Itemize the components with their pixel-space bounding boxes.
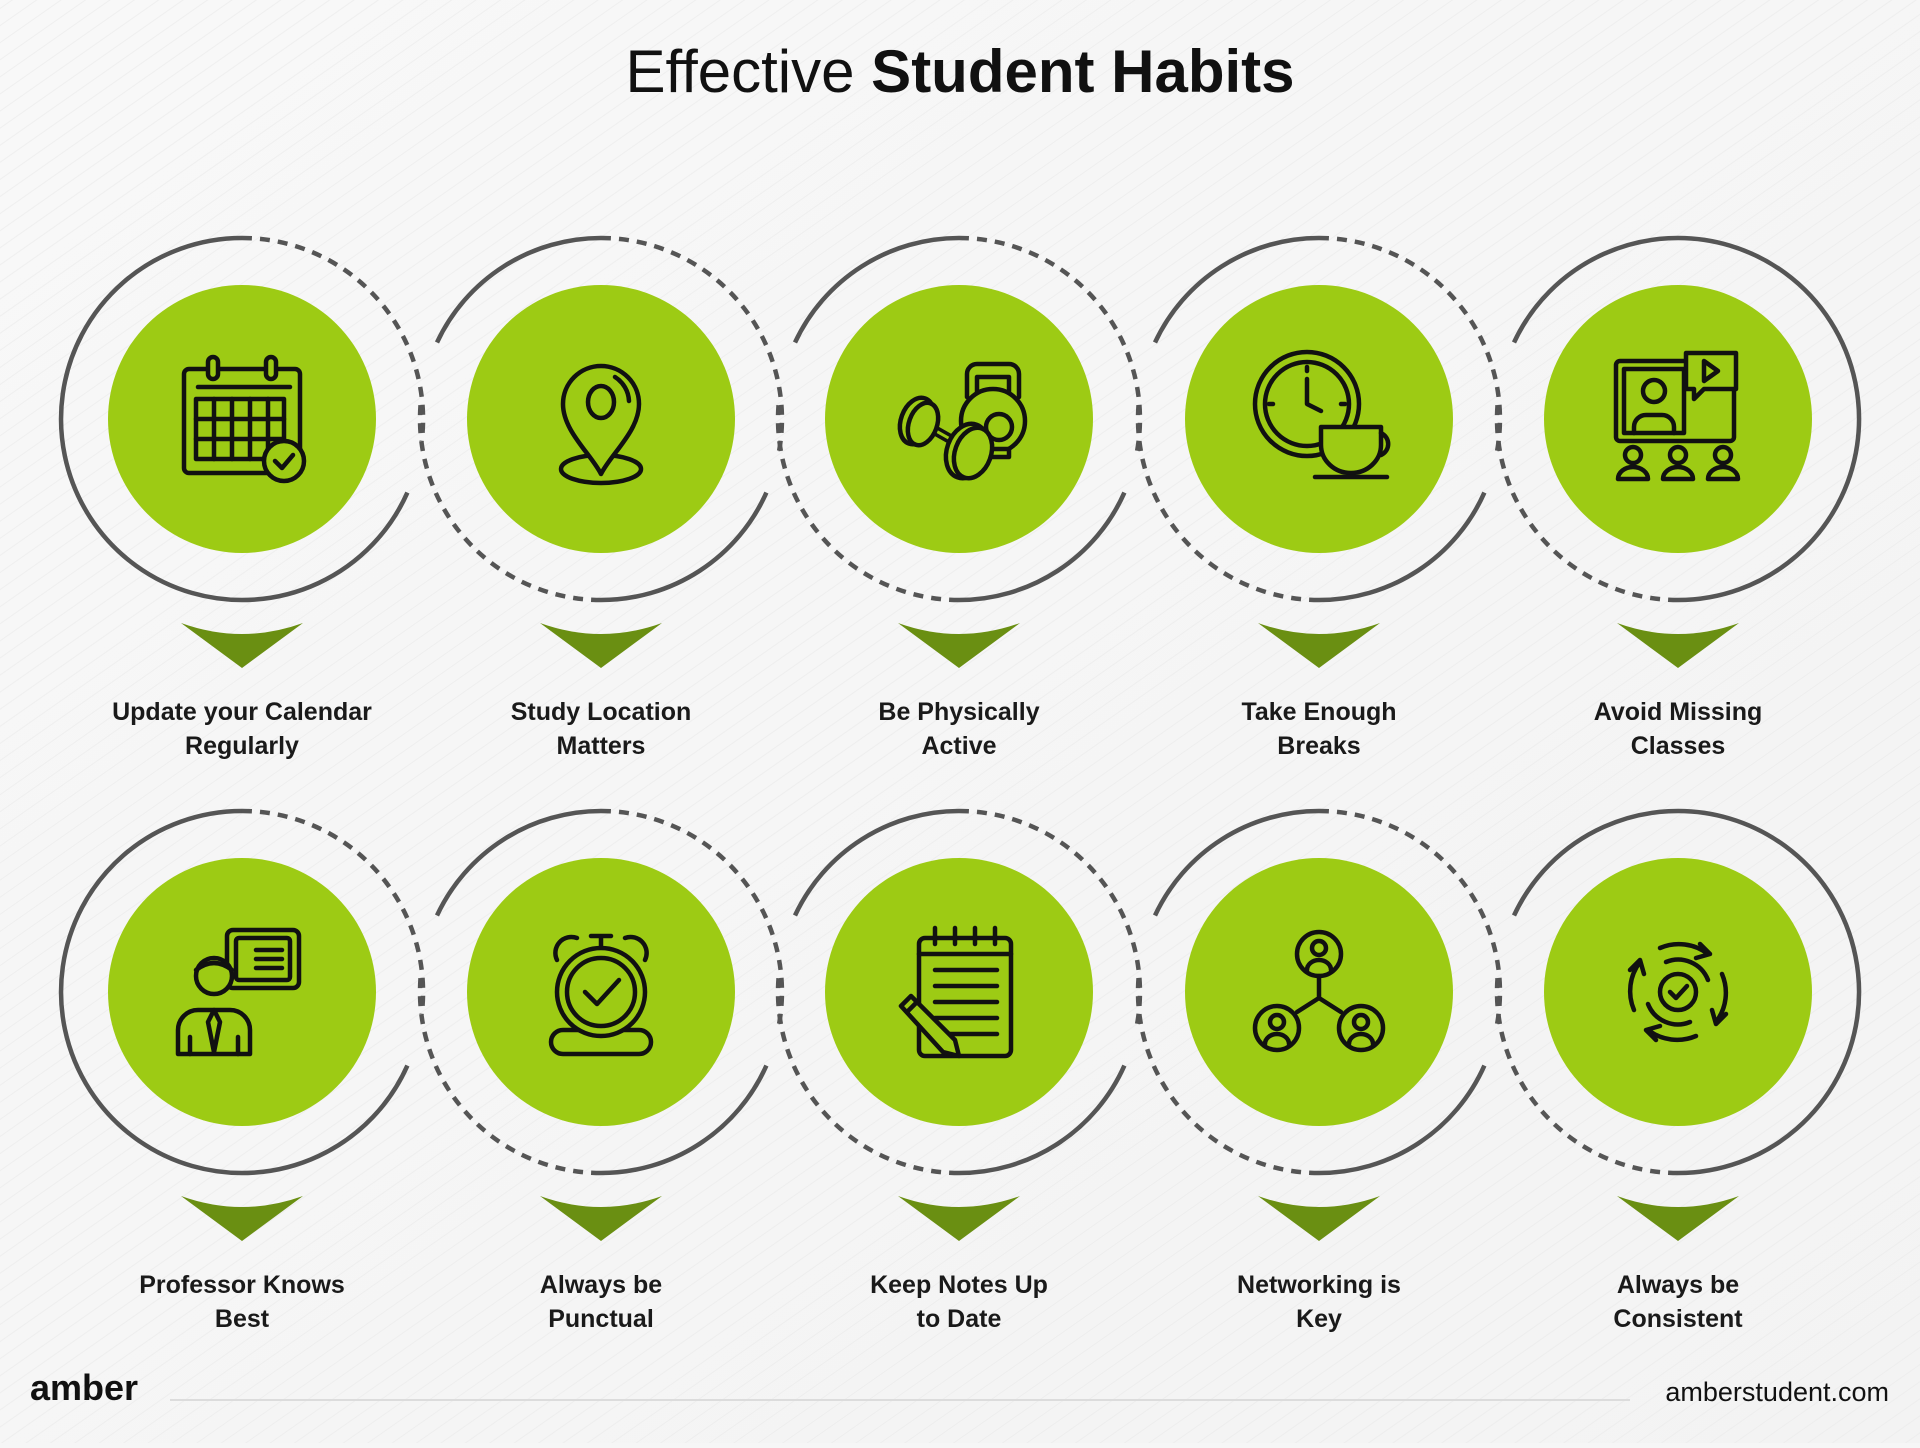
arrow — [1617, 1196, 1739, 1241]
label: Active — [921, 732, 997, 760]
icon: network — [1255, 932, 1383, 1050]
panel: Take Enough Breaks — [1138, 238, 1500, 600]
label: Always be — [1617, 1271, 1739, 1299]
label: Networking is — [1237, 1271, 1401, 1299]
footer logo: amber — [30, 1367, 138, 1408]
icon: cycle arrows — [1630, 944, 1726, 1040]
label: Study Location — [511, 698, 691, 726]
panel: Professor Knows Best — [61, 811, 423, 1173]
title: Effective Student Habits — [625, 38, 1295, 105]
arrow — [540, 1196, 662, 1241]
icon: dumbbell and kettlebell — [894, 364, 1025, 484]
panel: Be Physically Active — [778, 238, 1140, 600]
icon: notepad and pencil — [901, 928, 1011, 1056]
panel: Networking is Key — [1138, 811, 1500, 1173]
icon: online class — [1616, 353, 1738, 479]
footer url: amberstudent.com — [1665, 1377, 1889, 1407]
arrow — [540, 623, 662, 668]
panel: Always be Punctual — [420, 811, 782, 1173]
label: Avoid Missing — [1594, 698, 1762, 726]
label: Professor Knows — [139, 1271, 345, 1299]
label: Always be — [540, 1271, 662, 1299]
label: Keep Notes Up — [870, 1271, 1048, 1299]
arrow — [181, 1196, 303, 1241]
panel: Always be Consistent — [1497, 811, 1859, 1173]
panel: Update your Calendar Regularly — [61, 238, 423, 600]
icon: clock and cup — [1255, 352, 1388, 477]
arrow — [898, 623, 1020, 668]
label: Best — [215, 1305, 270, 1333]
label: Classes — [1631, 732, 1725, 760]
label: Breaks — [1277, 732, 1361, 760]
arrow — [1258, 623, 1380, 668]
label: Consistent — [1613, 1305, 1743, 1333]
panel: Avoid Missing Classes — [1497, 238, 1859, 600]
arrow — [1617, 623, 1739, 668]
panel: Keep Notes Up to Date — [778, 811, 1140, 1173]
label: Regularly — [185, 732, 299, 760]
icon: professor — [178, 930, 299, 1054]
arrow — [1258, 1196, 1380, 1241]
label: Take Enough — [1241, 698, 1397, 726]
label: Be Physically — [878, 698, 1040, 726]
icon: stopwatch — [551, 936, 651, 1054]
arrow — [898, 1196, 1020, 1241]
icon: calendar — [184, 357, 304, 481]
label: to Date — [917, 1305, 1001, 1333]
panel: Study Location Matters — [420, 238, 782, 600]
label: Key — [1296, 1305, 1342, 1333]
label: Punctual — [548, 1305, 654, 1333]
label: Update your Calendar — [112, 698, 372, 726]
icon: location pin — [561, 366, 641, 483]
arrow — [181, 623, 303, 668]
label: Matters — [557, 732, 645, 760]
